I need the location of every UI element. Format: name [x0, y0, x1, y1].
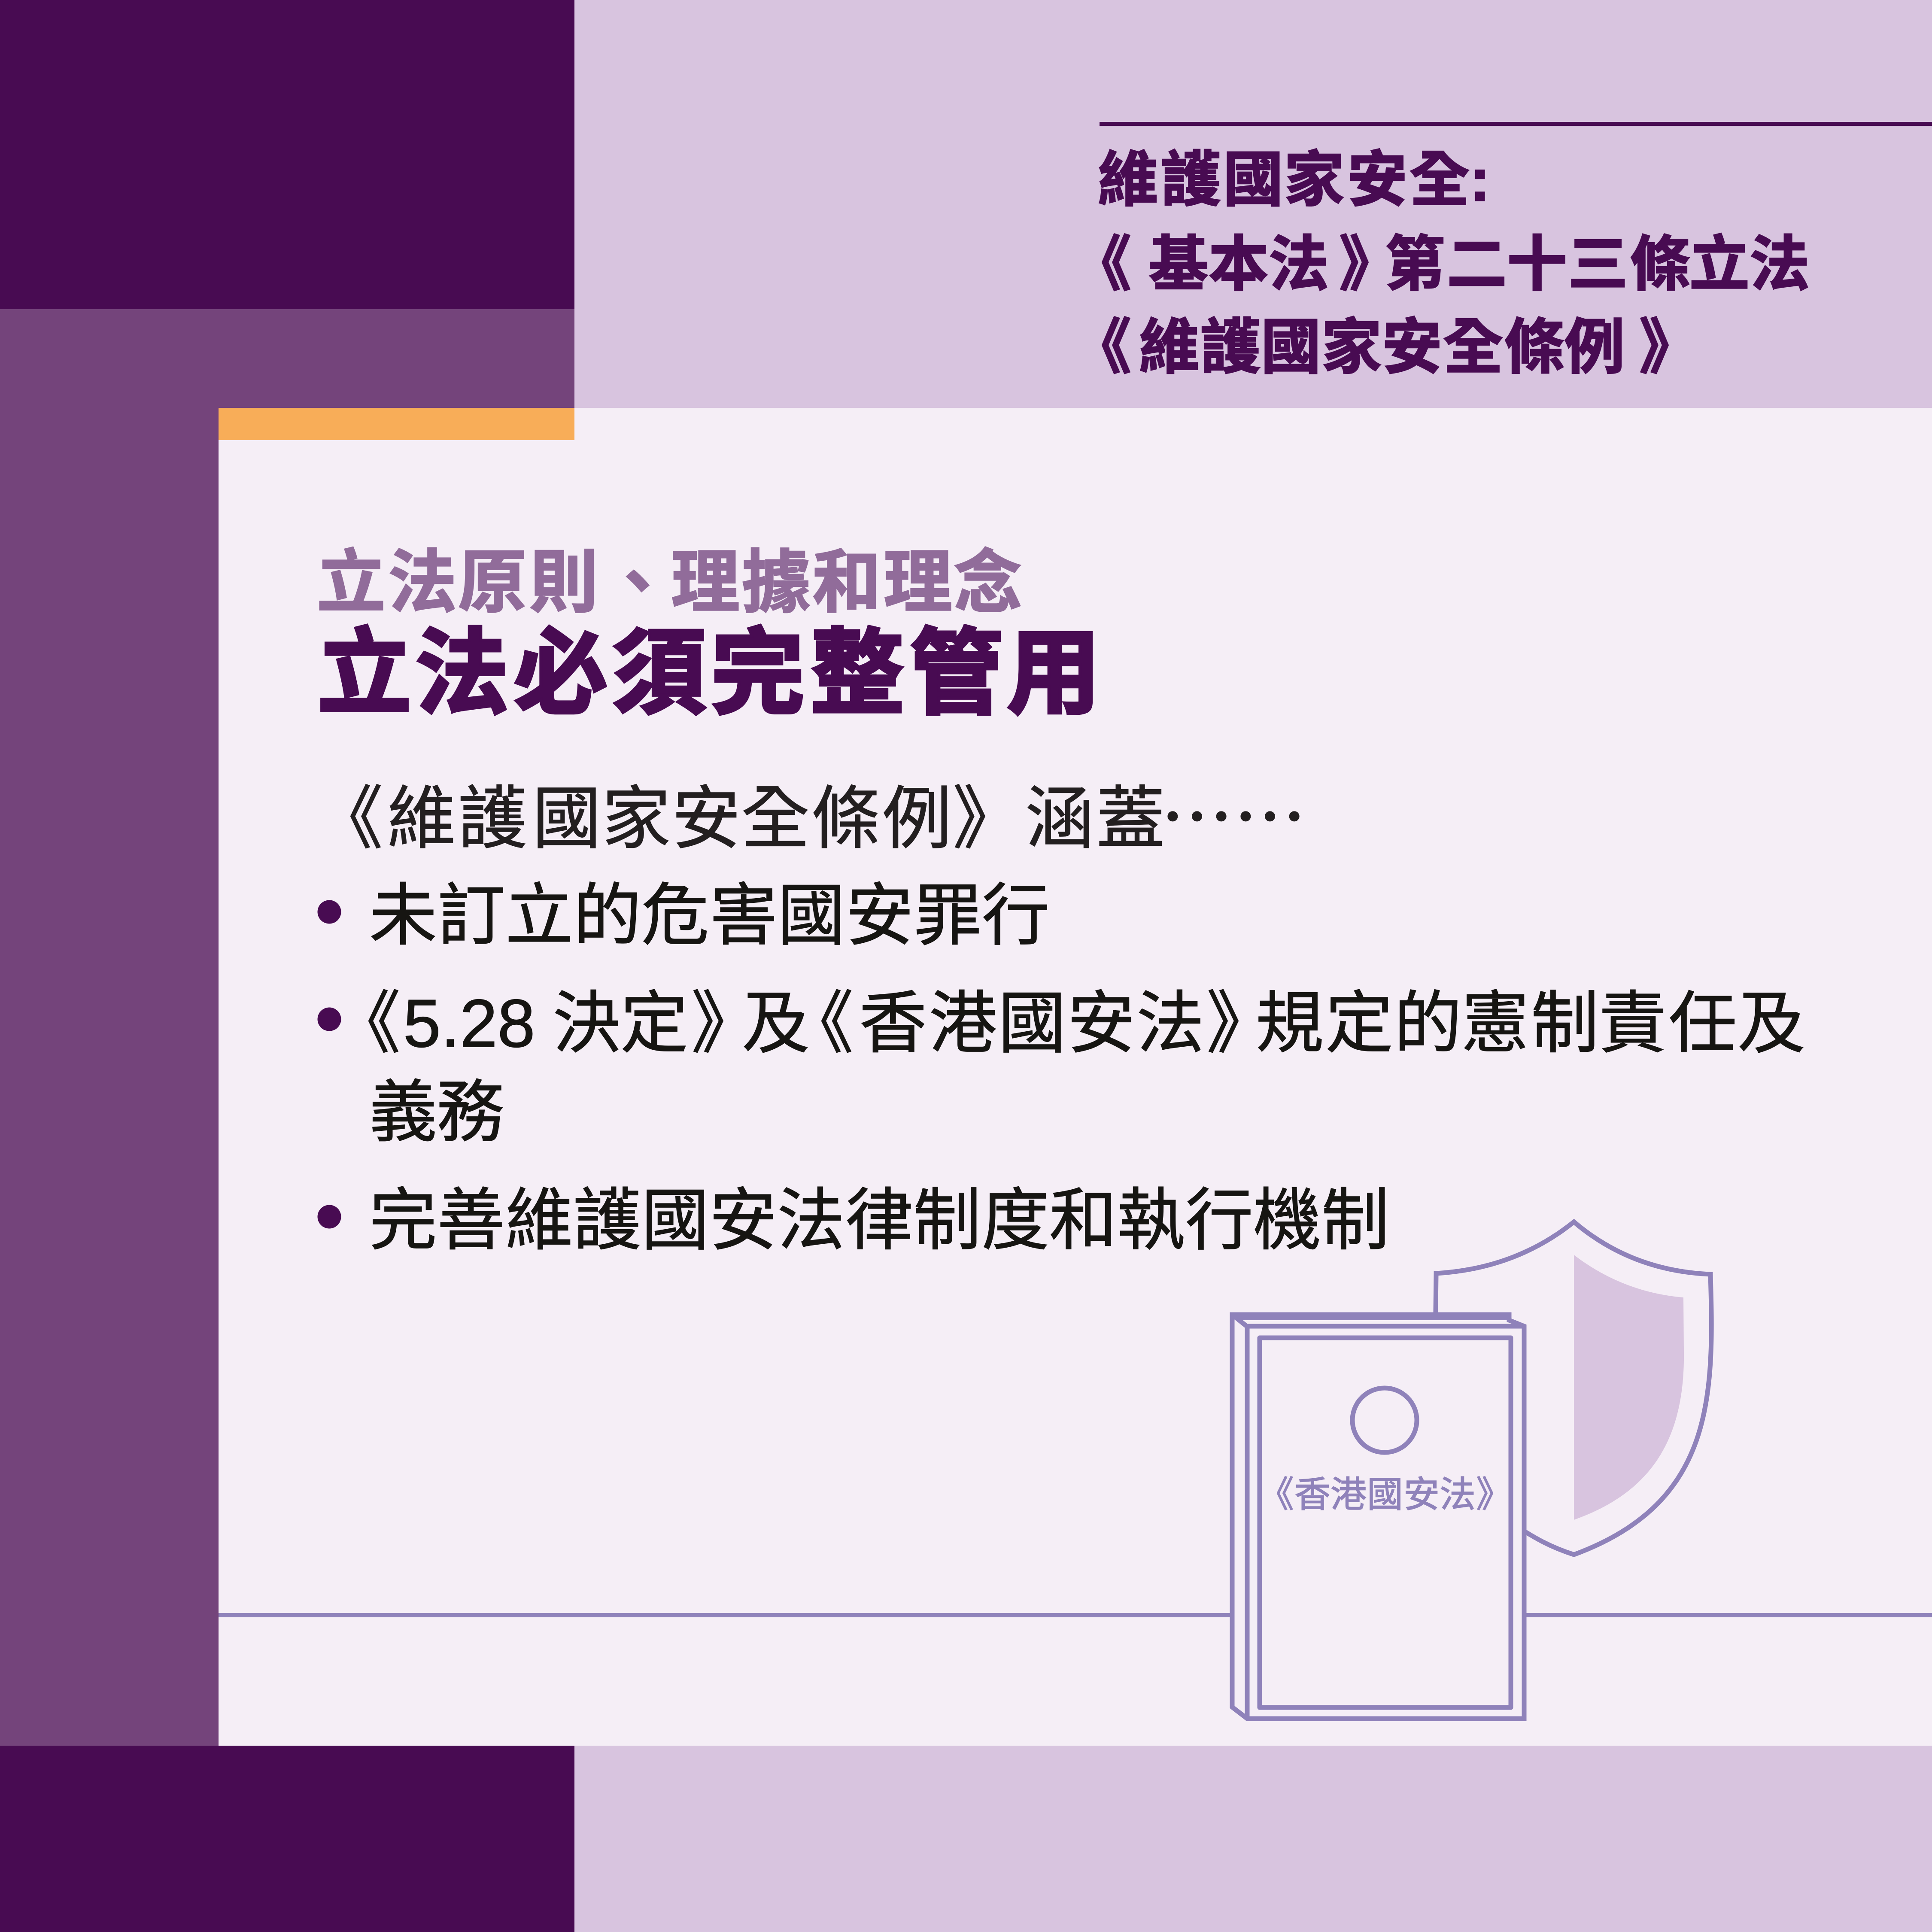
bullet 2: 決定: [553, 986, 688, 1061]
panel: mid purple band: [0, 309, 574, 1746]
title block: [1071, 146, 1810, 381]
title rule: [1100, 122, 1932, 126]
icon: shield: [1434, 1222, 1711, 1555]
panel: dark bottom-left block: [0, 1746, 574, 1932]
bullet 3: 完善維護國安法律制度和執行機制: [369, 1183, 1389, 1258]
title line 1: 維護國家安全:: [1098, 146, 1490, 213]
subheading: 立法原則、理據和理念: [317, 544, 1022, 621]
bullet list: [318, 878, 1805, 1258]
panel: lilac bottom block: [574, 1746, 1932, 1932]
bullet 2: 《: [786, 986, 854, 1061]
title line 2: 《基本法》第二十三條立法: [1071, 231, 1810, 298]
bullet 2: 義務: [369, 1075, 504, 1150]
bullet 2: 》: [691, 986, 759, 1061]
icon: law book: [1230, 1312, 1524, 1719]
panel: content background: [219, 408, 1932, 1746]
panel: dark top-left block: [0, 0, 574, 309]
bullet 2: 5.28: [403, 986, 535, 1061]
bullet 2: 香港國安法: [859, 986, 1204, 1061]
bullet 2: [318, 986, 1805, 1150]
ground line: [219, 1613, 1932, 1617]
bullet 2: 規定的憲制責任及: [1256, 986, 1805, 1061]
bullet 2: 《: [333, 986, 401, 1061]
main heading: 立法必須完整管用: [318, 622, 1100, 726]
book title: 《香港國安法》: [1258, 1474, 1512, 1515]
body intro line: 《維護國家安全條例》涵蓋: [314, 780, 1165, 857]
title line 3: 《維護國家安全條例》: [1071, 313, 1699, 381]
bullet 2: 》: [1206, 986, 1274, 1061]
bullet 2: 及: [742, 986, 810, 1061]
panel: orange accent bar: [219, 408, 574, 440]
body intro line: ……: [1160, 759, 1306, 865]
bullet 1: 未訂立的危害國安罪行: [369, 878, 1050, 954]
panel: lilac title block: [574, 0, 1932, 408]
